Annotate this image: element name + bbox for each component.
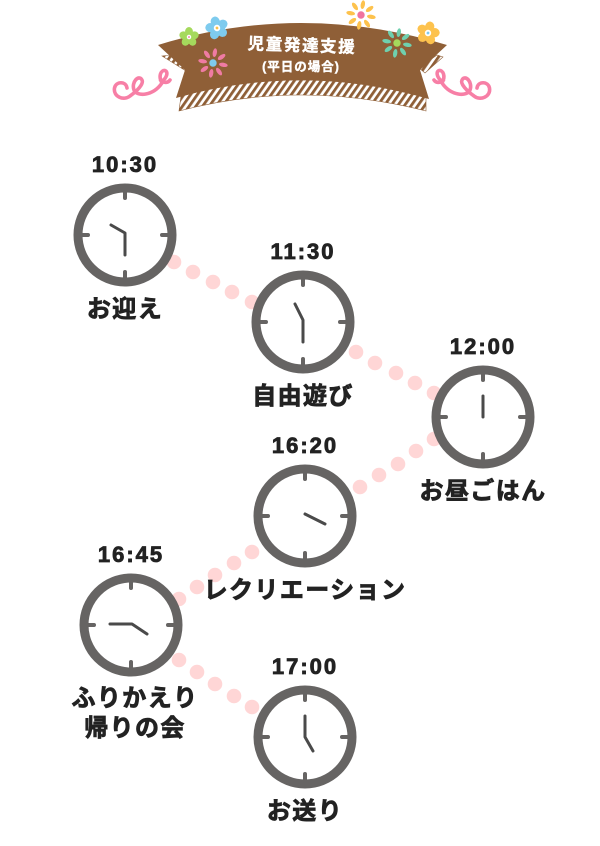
title banner xyxy=(114,0,490,111)
label line 1: ふりかえり xyxy=(72,685,198,712)
icon: orange flower xyxy=(413,18,443,48)
dotted connector: 10:30 to 11:30 xyxy=(167,255,259,309)
banner ribbon tails xyxy=(162,55,443,111)
time: 16:45 xyxy=(98,542,164,567)
clock item: 16:20 レクリエーション xyxy=(204,433,406,604)
label: お送り xyxy=(267,798,343,825)
time: 17:00 xyxy=(272,654,338,679)
banner subtitle: (平日の場合) xyxy=(262,59,340,74)
clock item: 16:45 ふりかえり帰りの会 xyxy=(72,542,198,742)
icon: right pink curl xyxy=(434,70,490,98)
icon: yellow sunburst flower xyxy=(346,0,376,30)
icon: green flower xyxy=(178,27,200,47)
dotted connector: 11:30 to 12:00 xyxy=(349,345,441,400)
icon: green sunburst flower xyxy=(382,28,412,58)
time: 16:20 xyxy=(272,433,338,458)
clock item: 17:00 お送り xyxy=(258,654,352,825)
clock xyxy=(78,188,172,282)
clock item: 10:30 お迎え xyxy=(78,152,172,323)
clock item: 12:00 お昼ごはん xyxy=(420,334,546,505)
icon: blue flower xyxy=(202,13,232,43)
time: 12:00 xyxy=(450,334,516,359)
clock xyxy=(258,469,352,563)
icon: pink sunburst flower xyxy=(198,48,228,78)
dotted connector: 16:45 to 17:00 xyxy=(172,653,259,714)
clock item: 11:30 自由遊び xyxy=(252,239,354,410)
label line 2: 帰りの会 xyxy=(84,715,186,742)
time: 10:30 xyxy=(92,152,158,177)
label: お迎え xyxy=(87,296,163,323)
dotted connector: 12:00 to 16:20 xyxy=(353,432,441,494)
clock xyxy=(436,370,530,464)
label: 自由遊び xyxy=(252,383,354,410)
clock xyxy=(256,275,350,369)
clock xyxy=(84,578,178,672)
dotted connector: 16:20 to 16:45 xyxy=(172,545,259,606)
label: お昼ごはん xyxy=(420,477,546,505)
banner title: 児童発達支援 xyxy=(247,33,357,57)
banner body xyxy=(158,23,447,99)
clock xyxy=(258,690,352,784)
time: 11:30 xyxy=(270,239,336,264)
label: レクリエーション xyxy=(204,577,406,604)
icon: left pink curl xyxy=(114,70,170,98)
